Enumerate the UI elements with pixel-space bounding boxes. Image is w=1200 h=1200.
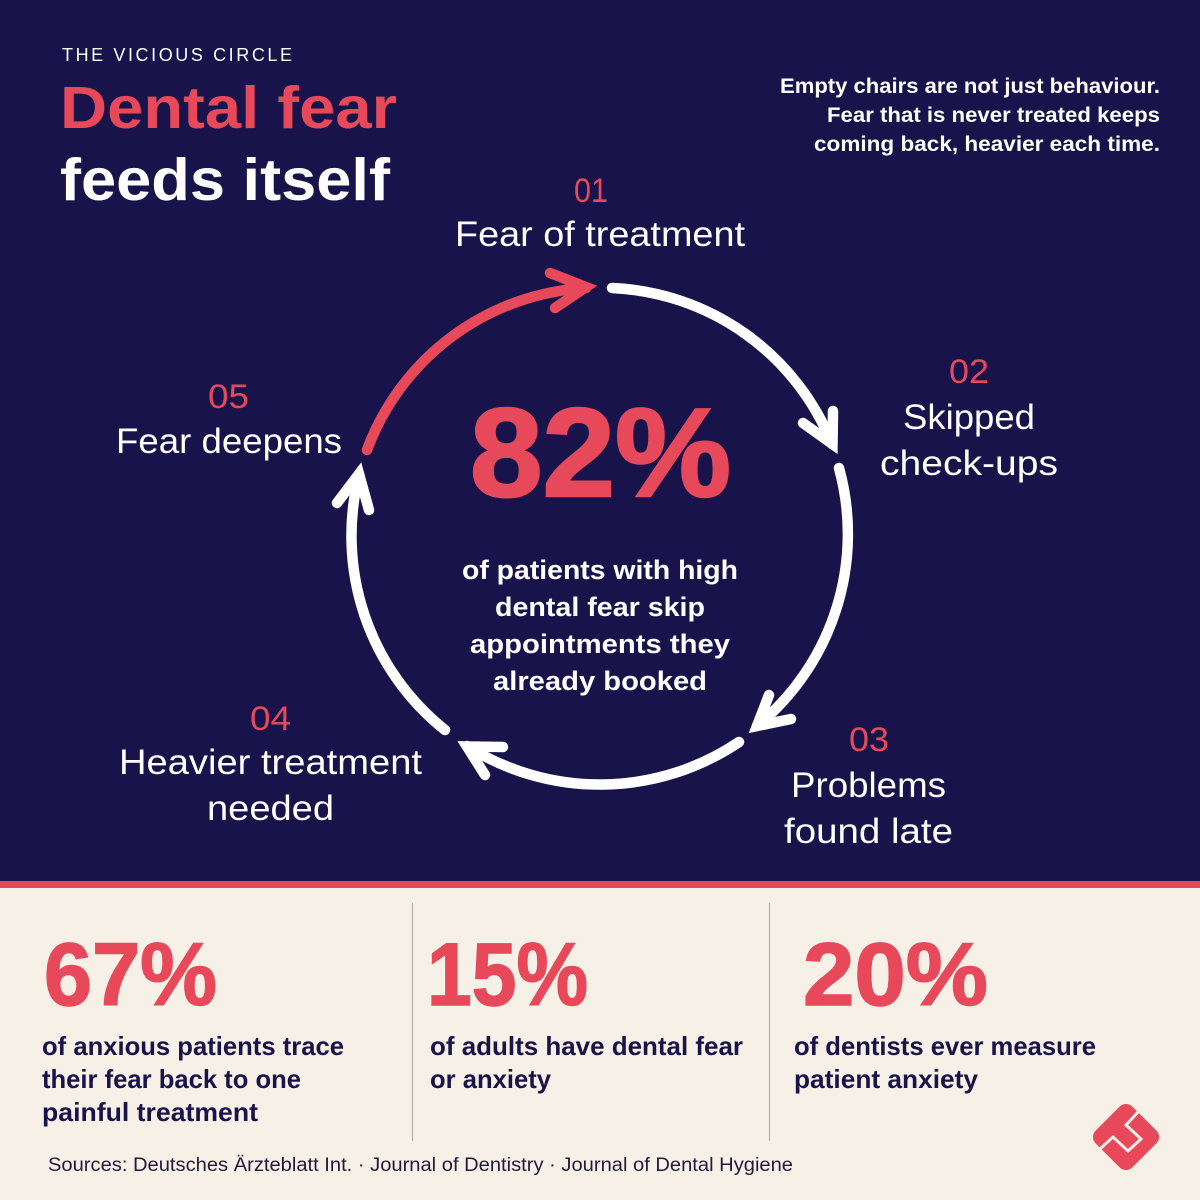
- stat: 20%: [794, 924, 1096, 1094]
- arrow: step 1 to 2: [612, 288, 833, 444]
- intro text block: [780, 75, 1160, 156]
- panel: navy background: [0, 0, 1200, 882]
- arrow: step 3 to 4: [467, 742, 739, 785]
- step 02 label: [880, 353, 1058, 483]
- step 04 label: needed: [207, 789, 334, 828]
- stat: 67%: of anxious patients trace: [42, 1031, 344, 1061]
- intro text block: Fear that is never treated keeps: [827, 104, 1160, 127]
- icon: logo: [1089, 1100, 1163, 1174]
- intro text block: Empty chairs are not just behaviour.: [780, 75, 1160, 98]
- step 01 label: 01: [574, 172, 608, 210]
- sources: Sources: Deutsches Ärzteblatt Int. · Journal of Dentistry · Journal of Dental Hygiene: [48, 1155, 793, 1176]
- central description: dental fear skip: [495, 592, 705, 622]
- step 03 label: [784, 721, 953, 851]
- step 04 label: Heavier treatment: [119, 743, 422, 782]
- arrow: step 5 back to 1 (highlight): [367, 273, 586, 450]
- intro text block: coming back, heavier each time.: [814, 133, 1160, 156]
- red divider band: [0, 881, 1200, 888]
- step 05 label: Fear deepens: [116, 422, 342, 461]
- step 03 label: found late: [784, 812, 953, 851]
- step 05 label: 05: [208, 378, 249, 416]
- stat: 67%: painful treatment: [42, 1097, 258, 1127]
- central description: already booked: [493, 666, 707, 696]
- title: Dental fear: [60, 75, 397, 141]
- step 02 label: 02: [949, 353, 989, 391]
- step 03 label: 03: [849, 721, 889, 759]
- stat: 15%: or anxiety: [430, 1064, 552, 1094]
- arrow: step 2 to 3: [757, 468, 848, 726]
- step 01 label: [455, 172, 745, 254]
- stat: 20%: of dentists ever measure: [794, 1031, 1096, 1061]
- stat: 15%: 15%: [427, 924, 588, 1024]
- step 03 label: Problems: [791, 766, 946, 805]
- step 04 label: 04: [250, 700, 291, 738]
- stat: 20%: patient anxiety: [794, 1064, 979, 1094]
- step 05 label: [116, 378, 342, 461]
- arrow: step 4 to 5: [337, 474, 445, 730]
- stat: 15%: [427, 924, 743, 1094]
- central description: of patients with high: [462, 555, 738, 585]
- title: [60, 75, 397, 213]
- panel: cream stats background: [0, 887, 1200, 1200]
- central description: [462, 555, 738, 696]
- stat: 20%: 20%: [803, 924, 988, 1024]
- step 02 label: check-ups: [880, 444, 1058, 483]
- stat: 67%: their fear back to one: [42, 1064, 301, 1094]
- column dividers: [412, 903, 770, 1141]
- step 04 label: [119, 700, 422, 828]
- step 01 label: Fear of treatment: [455, 215, 745, 254]
- central description: appointments they: [470, 629, 730, 659]
- eyebrow heading: THE VICIOUS CIRCLE: [62, 45, 292, 65]
- stat: 67%: 67%: [44, 924, 217, 1024]
- title: feeds itself: [60, 147, 390, 213]
- step 02 label: Skipped: [903, 398, 1035, 437]
- stat: 67%: [42, 924, 344, 1127]
- stat: 15%: of adults have dental fear: [430, 1031, 743, 1061]
- central statistic: 82%: [470, 382, 731, 523]
